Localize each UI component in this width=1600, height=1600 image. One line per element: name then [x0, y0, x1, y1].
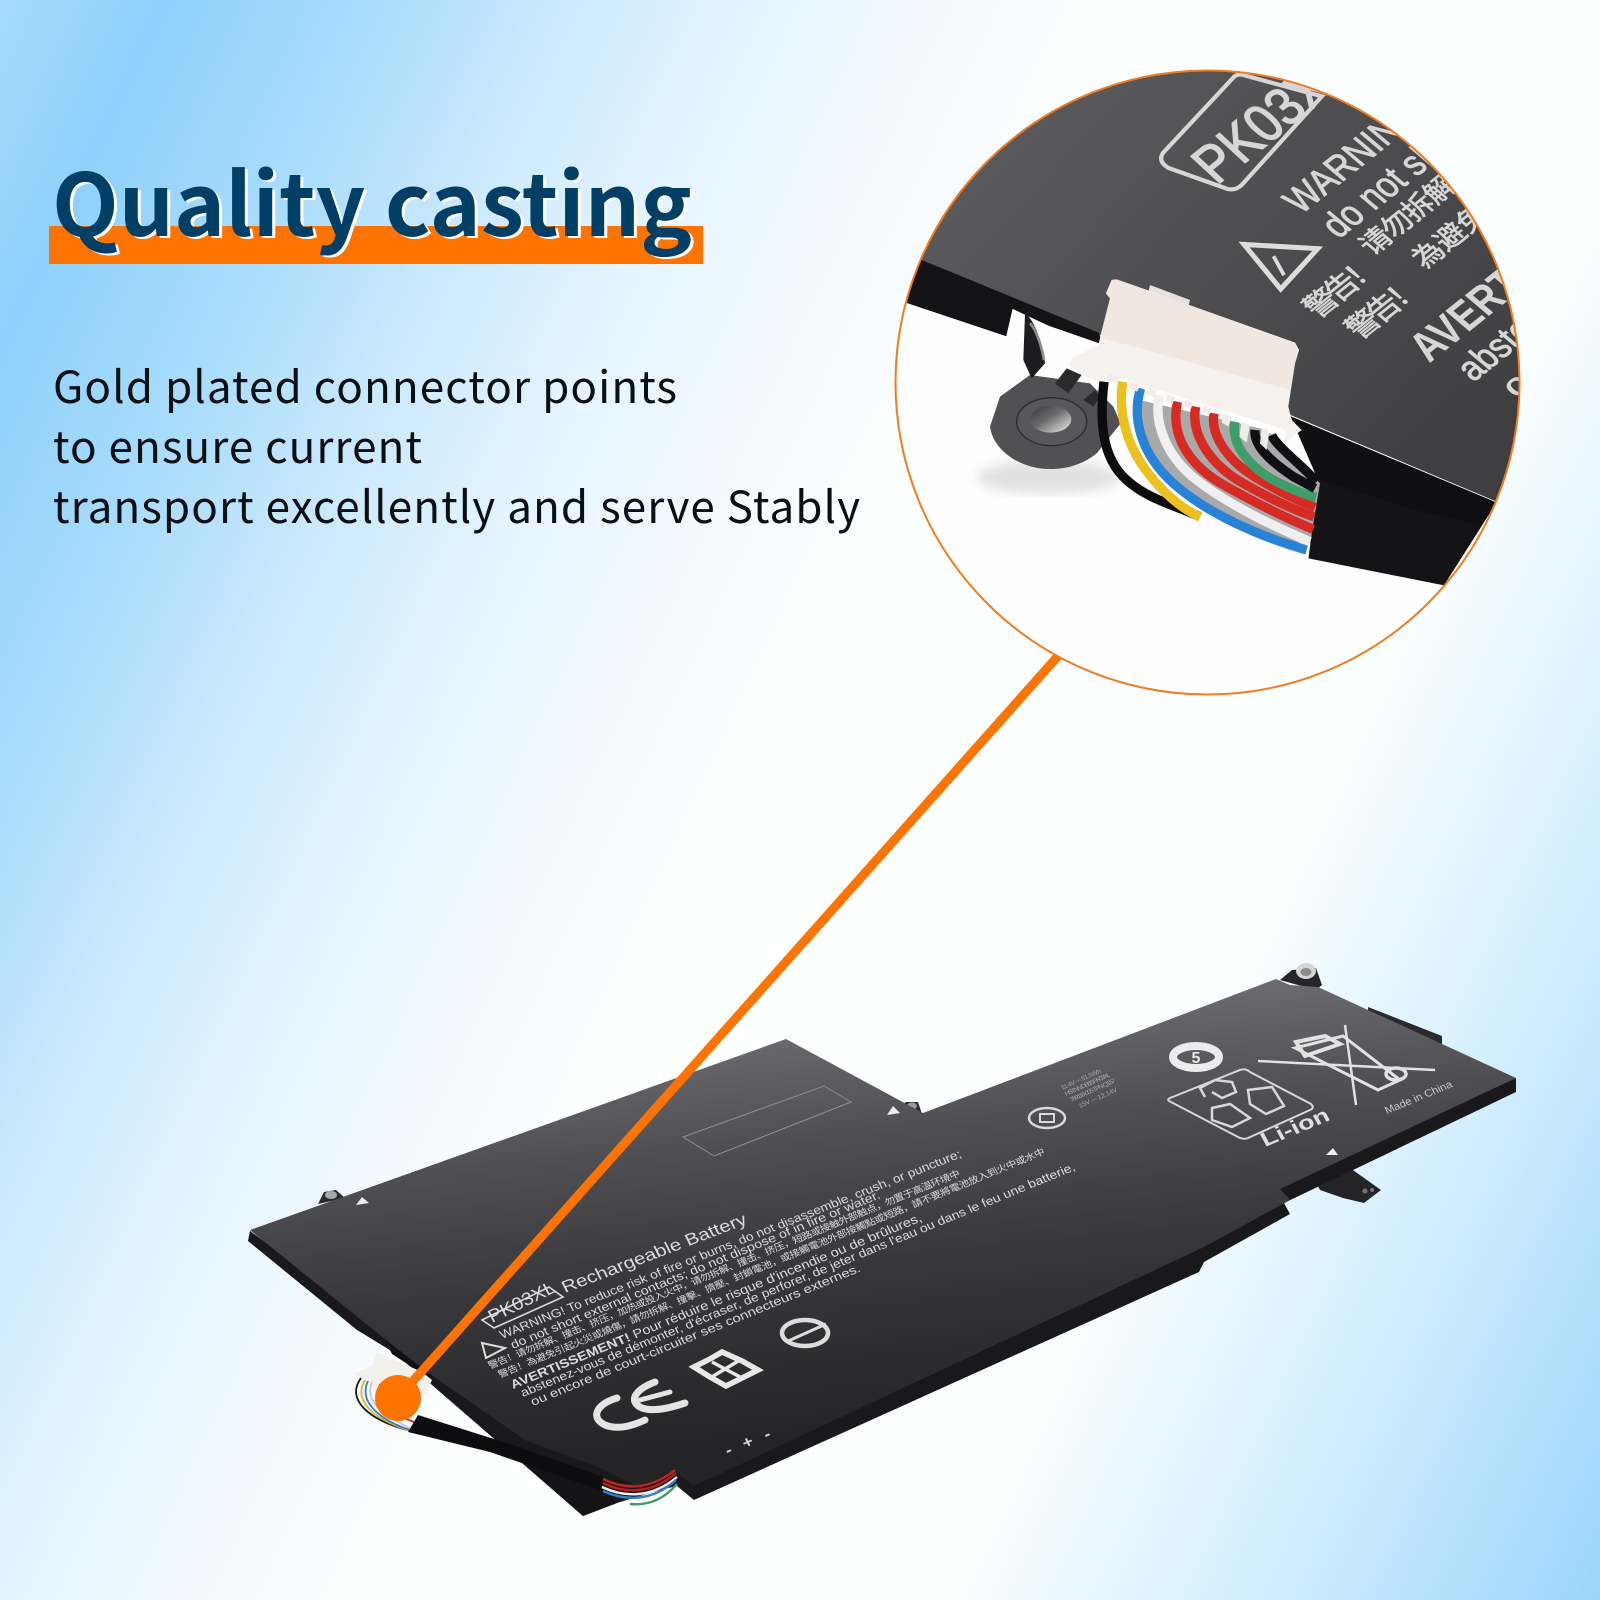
lens contents [906, 72, 1518, 586]
long wrapped cable [408, 1415, 603, 1490]
mounting hole [1030, 406, 1071, 433]
exposed wires at cable end [602, 1470, 677, 1504]
Li-ion recycling diamond [1168, 1069, 1313, 1139]
part number box: PK03XL [485, 1278, 559, 1327]
battery top face [250, 979, 1516, 1488]
battery edge right [1290, 416, 1495, 559]
battery side band [248, 1078, 1516, 1516]
description text block: transport excellently and serve Stably [53, 472, 860, 536]
connector contact teeth [1107, 373, 1269, 450]
small seal icon [1029, 1108, 1065, 1128]
wire gap shading [1140, 400, 1320, 543]
warning prefix one: 警告！ [1297, 250, 1388, 324]
rating text block: HSTNN-DB6S PK03XL [1064, 1072, 1112, 1098]
chinese warning line one: 请勿拆解 [1353, 171, 1464, 261]
warning lines: AVERTISSEMENT! Pour réduire le risque d'incendie ou de brûlures, [508, 1211, 924, 1392]
french warning headline: AVERT [1398, 259, 1534, 370]
warning triangle [1244, 244, 1318, 289]
title: Quality casting [49, 136, 703, 264]
title text: Quality casting [55, 138, 695, 263]
warning lines: 警告！為避免引起火災或燒傷，請勿拆解、撞擊、擠壓、封鎖電池，或接觸電池外部接觸點或短路，請不要將電池放入到火中或水中 [496, 1145, 1047, 1381]
french warning second line: abste [1448, 311, 1543, 388]
warning triangle [482, 1343, 505, 1358]
warning label text [482, 1145, 1077, 1409]
lower black cable foot [527, 1467, 617, 1516]
connector body [1069, 279, 1302, 450]
lens ring [896, 70, 1520, 694]
made in China label: Made in China [1383, 1079, 1455, 1116]
blank label outline [683, 1086, 851, 1156]
magnifier lens [880, 50, 1555, 694]
part number: PK03X [1179, 56, 1344, 194]
CE mark [597, 1382, 685, 1427]
rating text block [1060, 1068, 1119, 1110]
bottom right mounting ear [1313, 1163, 1381, 1203]
warning lines: do not short external contacts; do not dispose of in fire or water. [508, 1188, 882, 1352]
warning lines: abstenez-vous de démonter, d'écraser, de perforer, de jeter dans l'eau ou dans le feu une batterie, [518, 1160, 1077, 1400]
connector [355, 1352, 432, 1395]
top face [922, 72, 1518, 501]
battery heading: Rechargeable Battery [558, 1210, 750, 1296]
crossed out bin icon [1258, 1025, 1435, 1105]
right edge connector strip [1368, 1007, 1442, 1048]
description text block: to ensure current [53, 412, 422, 476]
rating text block: 789116-005 TPN-Q157 [1069, 1078, 1117, 1104]
rating text block: 11.4V ⎓ 51.5Wh [1060, 1068, 1103, 1092]
wires [1102, 382, 1317, 550]
connector wires [356, 1378, 414, 1431]
middle mounting screw [900, 1102, 922, 1114]
white background under cable [420, 1393, 466, 1424]
polarity marks: - + - [722, 1425, 774, 1459]
warning lines: WARNING! To reduce risk of fire or burns, do not disassemble, crush, or puncture; [497, 1147, 964, 1342]
dark gear detail behind connector [384, 1338, 434, 1378]
mounting ring [1017, 398, 1087, 446]
rating text block: 15V ⎓ 12.14V [1078, 1087, 1119, 1110]
warning headline: WARNING [1275, 94, 1431, 221]
battery edge left [906, 260, 1100, 344]
top right mounting screw [1280, 963, 1322, 990]
warning lines: ou encore de court-circuiter ses connecteurs externes. [528, 1261, 863, 1409]
recycling diamond mark [694, 1352, 758, 1386]
leader line [398, 656, 1058, 1398]
leader dot [375, 1375, 421, 1421]
description text block: Gold plated connector points [53, 352, 677, 416]
title highlight bar [49, 226, 703, 264]
warning second line: do not short [1313, 110, 1480, 245]
battery illustration [248, 963, 1516, 1516]
chinese warning line two: 為避免 [1406, 200, 1497, 274]
warning lines: 警告！请勿拆解、撞击、挤压，加热或投入火中，请勿拆解、撞击、挤压，短路或接触外部触点，勿置于高温环境中 [486, 1167, 962, 1372]
left mounting screw [318, 1190, 345, 1204]
french warning third line: ou [1494, 354, 1555, 404]
mounting ear [990, 313, 1121, 469]
title text: Quality casting [52, 136, 692, 261]
warning prefix two: 警告！ [1339, 271, 1430, 345]
cable wrap [1308, 496, 1482, 586]
description text block [53, 352, 860, 536]
crossed circle mark [782, 1320, 828, 1346]
part number box [1161, 75, 1322, 189]
number 5 recycling badge [1173, 1046, 1219, 1068]
arrow marks [356, 1106, 1338, 1205]
ear shadow [977, 460, 1120, 494]
cable and wires [355, 1338, 677, 1504]
lens white background [896, 70, 1520, 694]
number 5 recycling badge: 5 [1192, 1050, 1201, 1067]
Li-ion label: Li-ion [1256, 1103, 1333, 1151]
